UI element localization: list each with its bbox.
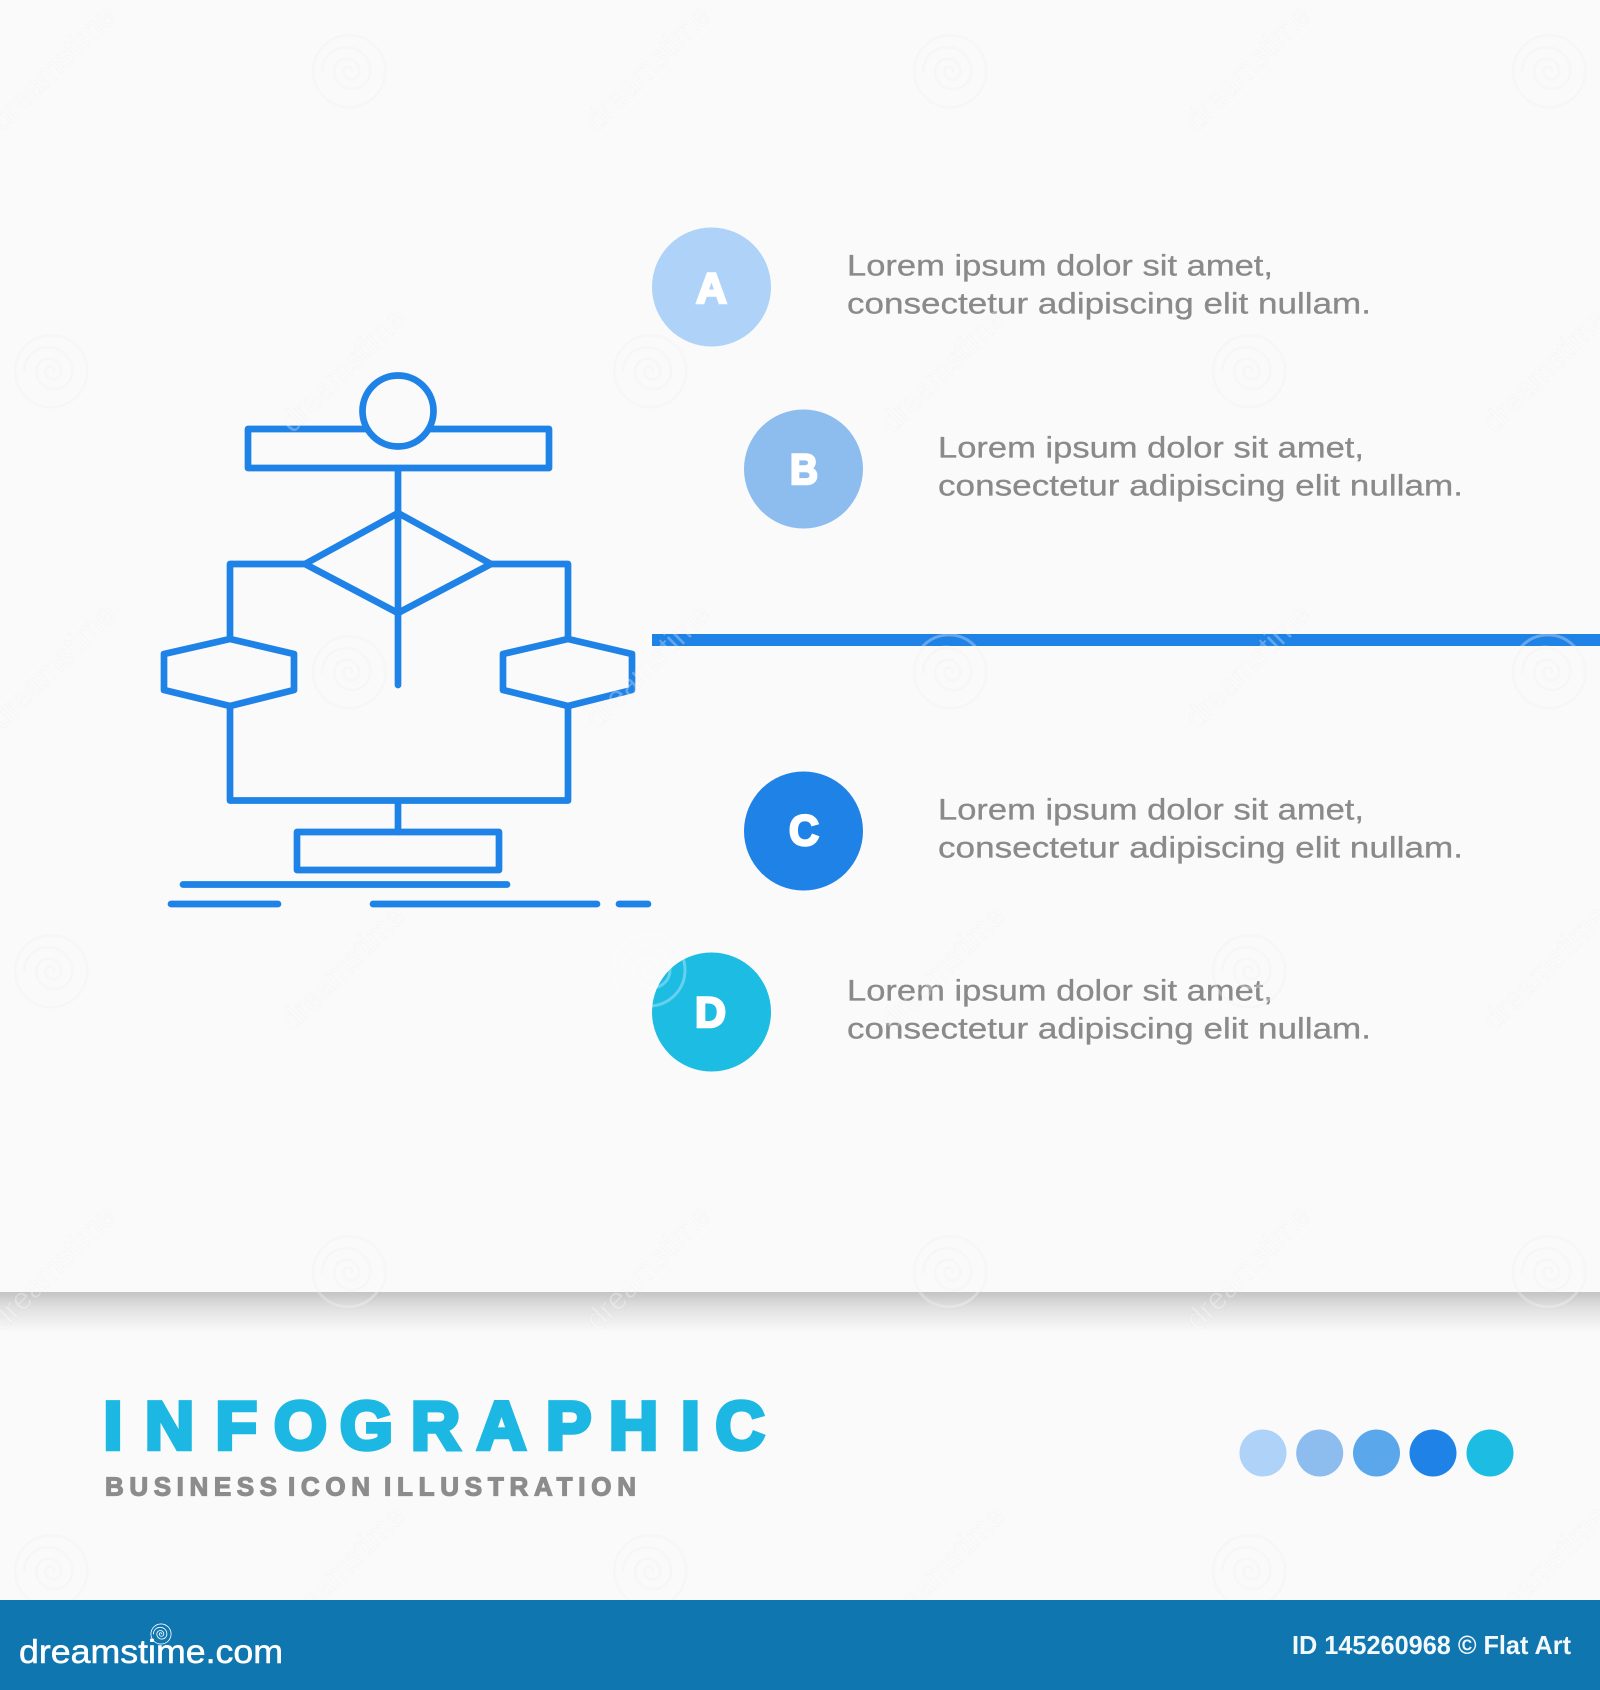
item C	[744, 772, 1463, 890]
watermark wordmarks	[0, 312, 1292, 1310]
letter D: D	[695, 989, 726, 1037]
footer shadow band	[0, 1292, 1600, 1332]
text A: Lorem ipsum dolor sit amet,	[847, 250, 1273, 283]
letter A: A	[696, 265, 727, 313]
watermark wordmarks: dreamstime	[273, 300, 412, 439]
letter B: B	[790, 446, 818, 494]
circle A	[652, 228, 771, 346]
watermark wordmarks: dreamstime	[578, 596, 717, 735]
circle B	[744, 410, 863, 528]
bottom rectangle	[297, 832, 499, 870]
watermark wordmarks: dreamstime	[1178, 1198, 1317, 1337]
watermark wordmarks: dreamstime	[873, 300, 1012, 439]
letter C: C	[789, 807, 819, 855]
item A	[652, 228, 1371, 346]
heading: INFOGRAPHIC: INFOGRAPHIC	[104, 1388, 765, 1464]
item B	[744, 410, 1463, 528]
horizontal divider line	[652, 634, 1600, 646]
subheading: ICON	[288, 1472, 370, 1502]
circle C	[744, 772, 863, 890]
footer logo	[19, 1624, 283, 1670]
watermark spiral shadows	[8, 312, 1292, 1307]
left hexagon	[164, 639, 294, 706]
text D: consectetur adipiscing elit nullam.	[847, 1013, 1371, 1046]
top rectangle	[248, 429, 549, 468]
text B: Lorem ipsum dolor sit amet,	[938, 432, 1364, 465]
watermark wordmarks: dreamstime	[578, 1198, 717, 1337]
logo wordmark: dreamstime.com	[19, 1633, 283, 1670]
watermark wordmarks: dreamstime	[873, 1498, 1012, 1637]
circle D	[652, 952, 771, 1072]
text C: consectetur adipiscing elit nullam.	[938, 832, 1463, 865]
text C: Lorem ipsum dolor sit amet,	[938, 794, 1364, 827]
text A: consectetur adipiscing elit nullam.	[847, 288, 1371, 321]
watermark wordmarks: dreamstime	[1178, 0, 1317, 137]
subheading: BUSINESS	[105, 1472, 277, 1502]
footer bar	[0, 1600, 1600, 1690]
text D: Lorem ipsum dolor sit amet,	[847, 975, 1273, 1008]
decision diamond	[305, 513, 491, 613]
progress dots	[1240, 1430, 1514, 1476]
watermark wordmarks: dreamstime	[273, 1498, 412, 1637]
icon: algorithm flowchart	[164, 376, 648, 904]
ground lines	[171, 884, 648, 904]
item D	[652, 952, 1371, 1072]
central stem	[395, 471, 401, 685]
footer credit: ID 145260968 © Flat Art	[1292, 1630, 1571, 1660]
text B: consectetur adipiscing elit nullam.	[938, 470, 1463, 503]
watermark wordmarks: dreamstime	[1178, 596, 1317, 735]
right hexagon	[503, 639, 632, 706]
watermark wordmarks: dreamstime	[873, 898, 1012, 1037]
top circle	[362, 376, 434, 446]
logo swirl	[151, 1624, 171, 1644]
watermark wordmarks: dreamstime	[578, 0, 717, 137]
watermark wordmarks: dreamstime	[273, 898, 412, 1037]
watermark spirals	[286, 312, 1579, 1308]
branch connectors	[230, 564, 568, 832]
subheading: ILLUSTRATION	[384, 1472, 636, 1502]
watermark pattern	[0, 312, 1579, 1310]
